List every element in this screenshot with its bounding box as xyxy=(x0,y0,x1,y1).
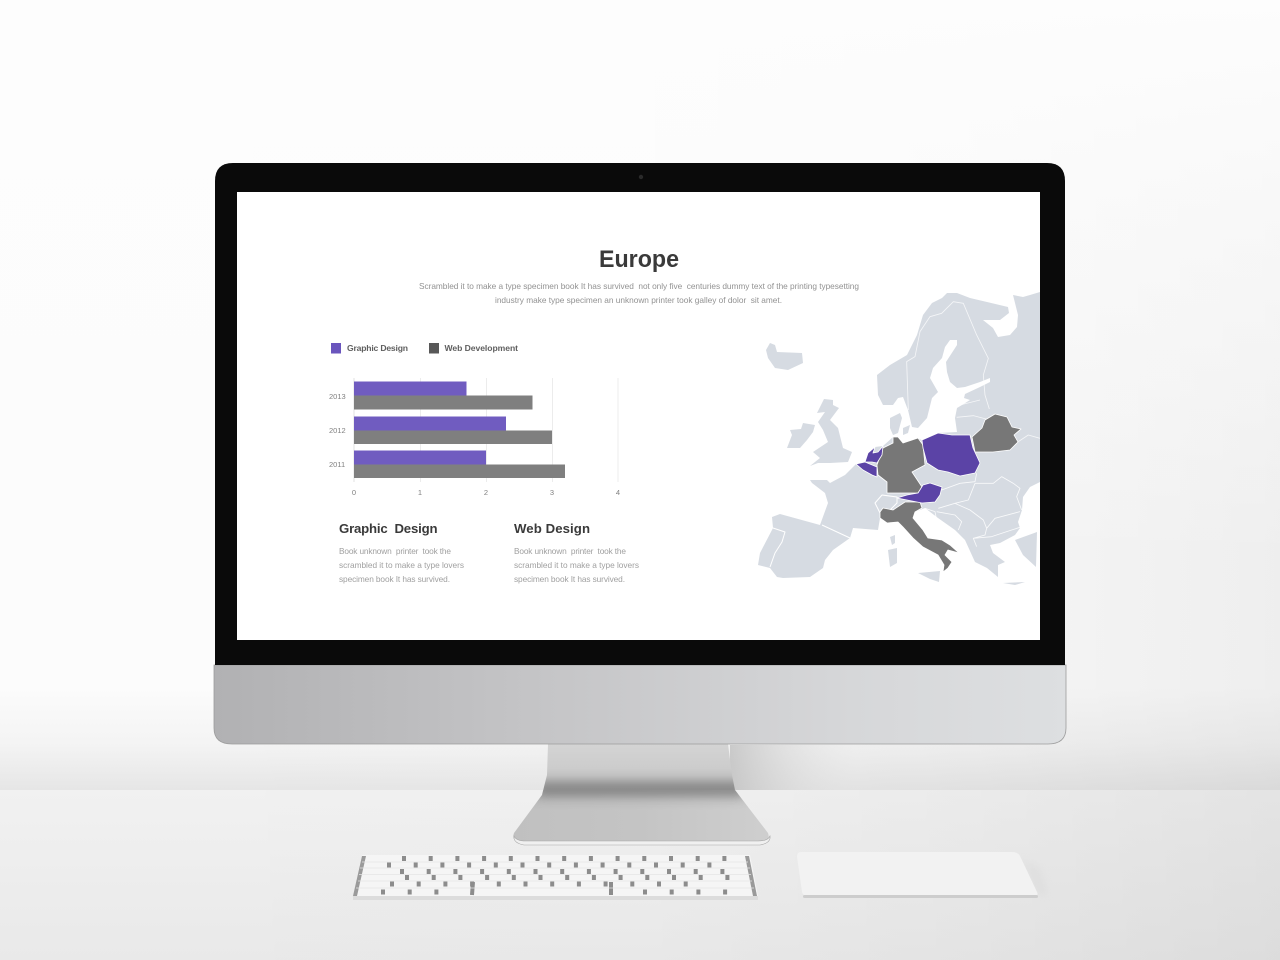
monitor black bezel xyxy=(215,163,1065,665)
axis labels: 4 xyxy=(616,488,620,497)
stand lip xyxy=(514,836,770,845)
map: Ireland xyxy=(787,423,815,448)
map: Denmark xyxy=(890,413,910,435)
stand neck and base xyxy=(513,744,769,841)
map: Italy xyxy=(880,502,959,572)
text block: graphic design: Graphic Design xyxy=(339,521,438,536)
text block: web design: scrambled it to make a type lovers xyxy=(514,560,639,570)
bars 2011 xyxy=(354,450,565,478)
legend xyxy=(331,343,518,354)
keyboard xyxy=(353,855,758,900)
subtitle text xyxy=(419,281,859,305)
map: central and south-east borders xyxy=(925,473,1022,547)
map: Belgium xyxy=(856,462,877,477)
bars 2012 xyxy=(354,416,552,444)
text block: web design: Book unknown printer took the xyxy=(514,546,626,556)
map: Great Britain xyxy=(810,399,852,466)
axis labels: 3 xyxy=(550,488,554,497)
map of Europe xyxy=(758,292,1040,585)
monitor body xyxy=(214,163,1066,744)
text block: graphic design: scrambled it to make a type lovers xyxy=(339,560,464,570)
axis labels: 2013 xyxy=(329,392,346,401)
axis labels: 2011 xyxy=(329,460,345,469)
axis labels: 1 xyxy=(418,488,422,497)
map: Netherlands xyxy=(865,446,883,463)
map: Austria xyxy=(897,483,942,503)
map: Mediterranean islands xyxy=(888,535,1025,585)
keyboard key gaps xyxy=(381,858,748,895)
subtitle text: Scrambled it to make a type specimen book It has survived not only five centuries dummy text of the printing typesetting xyxy=(419,281,859,291)
map: Iceland xyxy=(766,343,803,370)
axis labels: 2 xyxy=(484,488,488,497)
legend: web development: Web Development xyxy=(444,343,518,353)
monitor stand xyxy=(505,744,775,846)
axis labels: 0 xyxy=(352,488,356,497)
map: Iberia borders xyxy=(770,525,850,567)
camera xyxy=(639,175,643,179)
monitor chin xyxy=(214,665,1066,744)
bar chart xyxy=(329,378,620,497)
text block: web design xyxy=(514,521,639,584)
trackpad xyxy=(797,852,1048,898)
text block: web design: Web Design xyxy=(514,521,590,536)
text block: web design: specimen book It has survived. xyxy=(514,574,625,584)
screen xyxy=(237,192,1040,640)
title: Europe xyxy=(599,246,679,273)
map: grey mainland xyxy=(758,292,1040,578)
bars 2013 xyxy=(354,382,532,410)
map: northern borders xyxy=(907,302,1040,442)
map: Belarus xyxy=(972,414,1021,452)
map: Switzerland xyxy=(875,495,897,513)
trackpad shadow xyxy=(1020,858,1048,895)
subtitle text: industry make type specimen an unknown printer took galley of dolor sit amet. xyxy=(495,295,782,305)
text block: graphic design xyxy=(339,521,464,584)
legend: graphic design: Graphic Design xyxy=(347,343,408,353)
axis labels: 2012 xyxy=(329,426,346,435)
map: Germany xyxy=(877,437,925,493)
map: Turkey xyxy=(1015,532,1037,567)
text block: graphic design: specimen book It has survived. xyxy=(339,574,450,584)
axis labels xyxy=(329,392,620,497)
text block: graphic design: Book unknown printer took the xyxy=(339,546,451,556)
map: Poland xyxy=(922,433,980,476)
